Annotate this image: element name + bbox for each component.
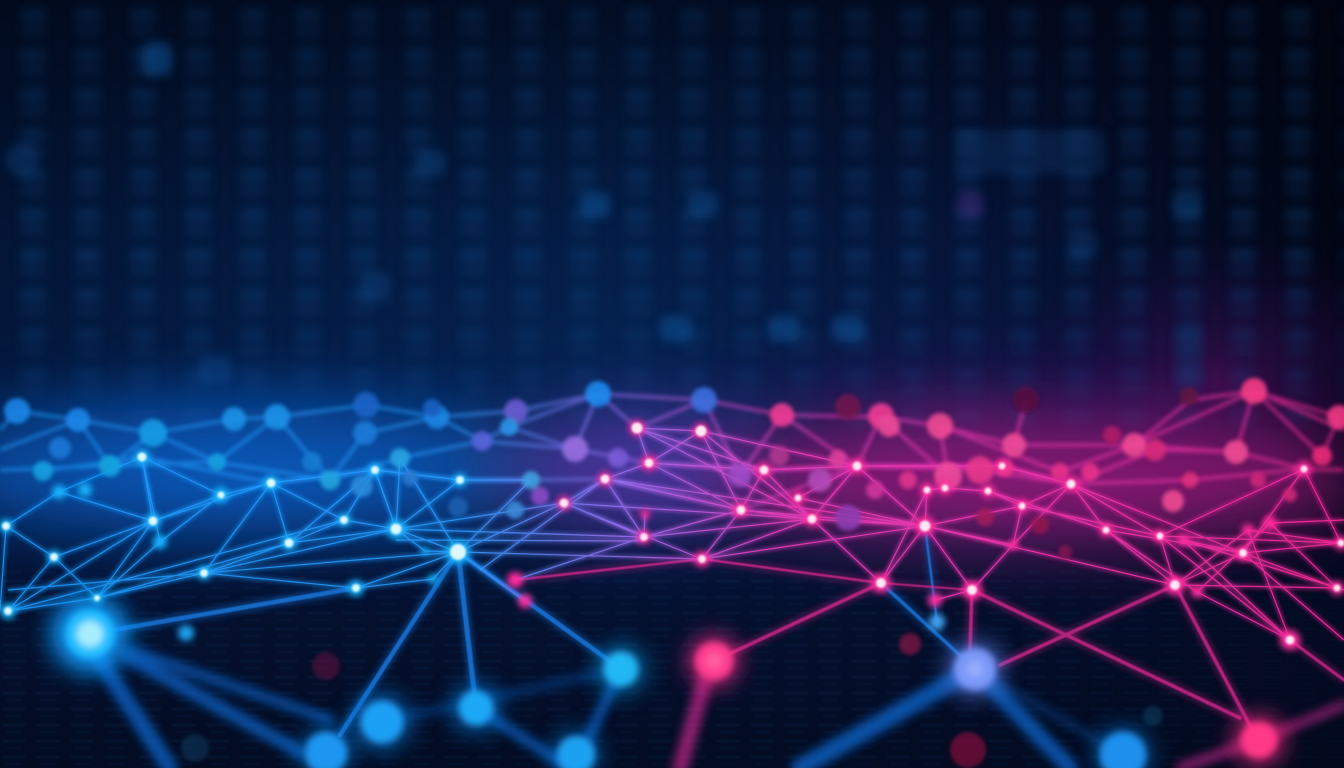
large foreground nodes glow bbox=[52, 596, 1283, 768]
fine mesh edges bbox=[0, 428, 1344, 640]
blurred data grid backdrop bbox=[0, 0, 1344, 430]
pink bright nodes bbox=[507, 420, 1344, 650]
ambient mesh glow bbox=[0, 408, 1344, 538]
far blurred mesh edges bbox=[0, 391, 1344, 510]
large foreground nodes bbox=[66, 610, 1277, 768]
floor texture bbox=[2, 580, 1078, 765]
blue bright nodes bbox=[0, 449, 470, 619]
far background nodes bbox=[4, 378, 1344, 768]
bottom thick foreground edges bbox=[90, 526, 1344, 768]
